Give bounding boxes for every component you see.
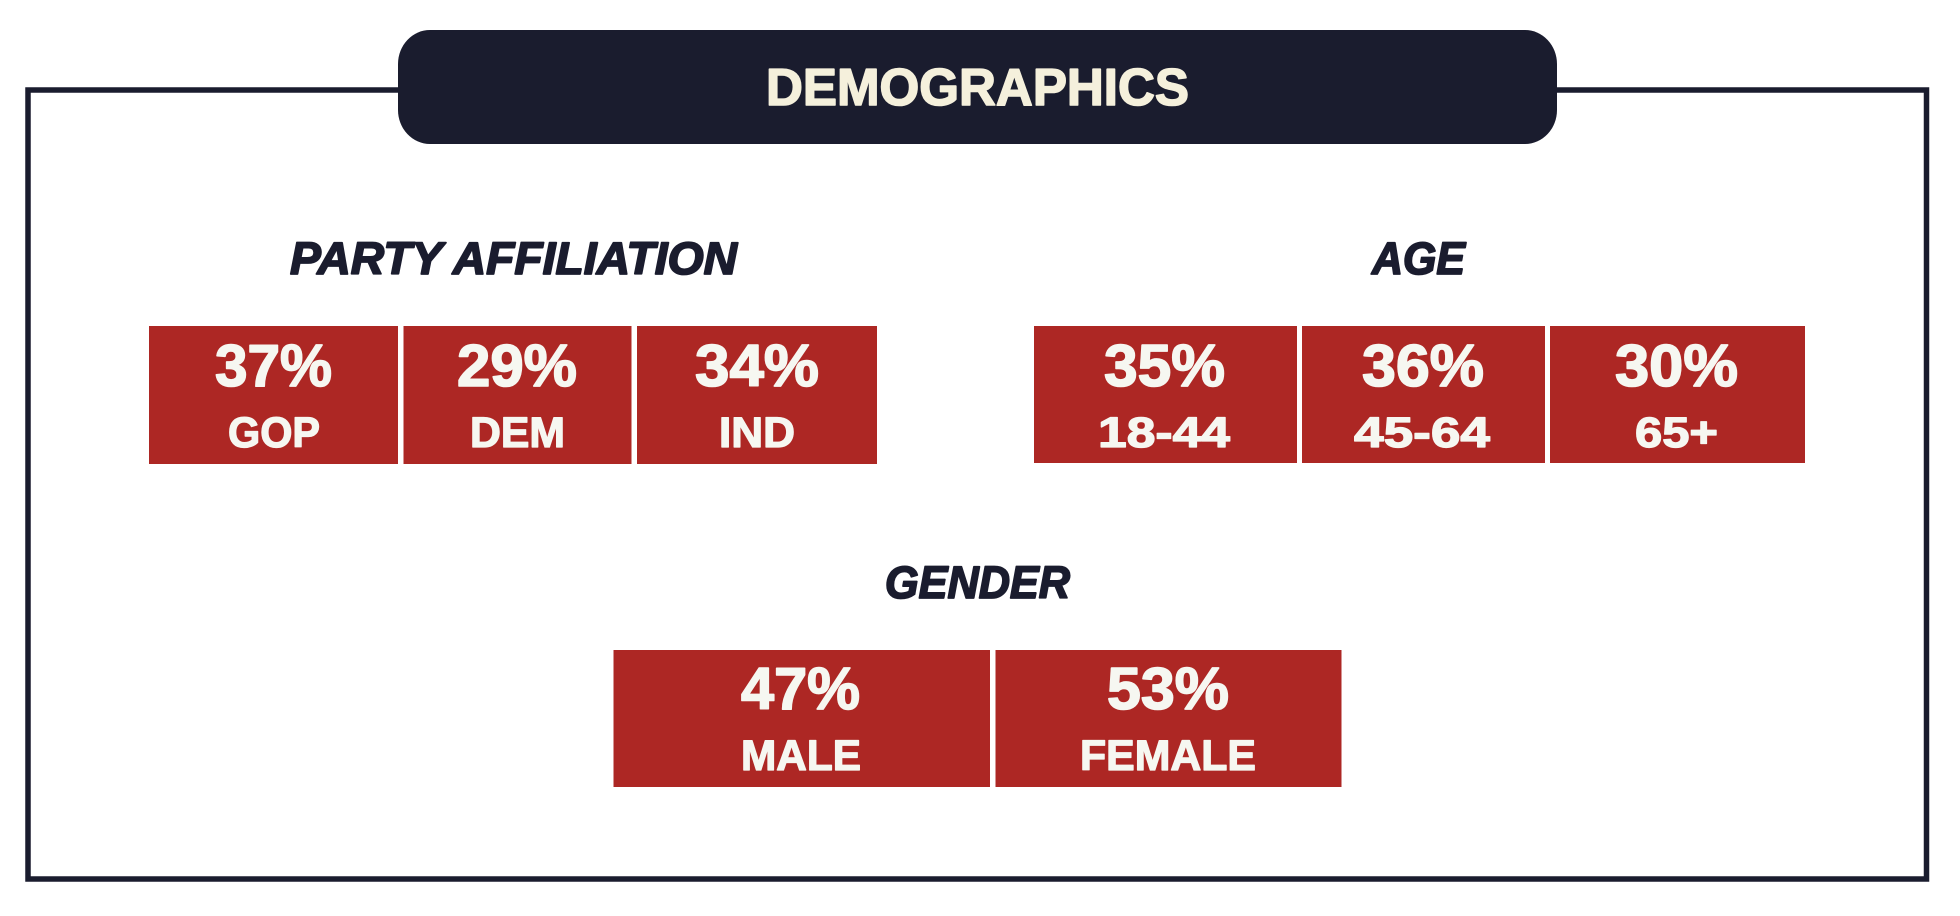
stat: 45-64 36%: 45-64	[1354, 409, 1490, 457]
stat: IND 34%: IND	[719, 409, 795, 457]
stat: 18-44 35%: 35%	[1104, 333, 1225, 399]
stat: DEM 29%: DEM	[470, 409, 565, 457]
stat: DEM 29%	[404, 326, 632, 464]
stat: male 47%: MALE	[741, 732, 861, 780]
stat: IND 34%	[637, 326, 877, 464]
group: age	[1034, 233, 1805, 463]
stat: 65+ 30%	[1550, 326, 1805, 463]
title: DEMOGRAPHICS	[766, 59, 1189, 117]
stat: female 53%: FEMALE	[1080, 732, 1256, 780]
stat: male 47%: 47%	[741, 656, 860, 722]
heading: age: AGE	[1371, 233, 1467, 284]
stat: DEM 29%: 29%	[457, 333, 577, 399]
group: party affiliation	[149, 233, 877, 464]
stat: GOP 37%: GOP	[228, 409, 320, 457]
group: gender	[614, 557, 1342, 787]
stat: 18-44 35%	[1034, 326, 1297, 463]
stat: 45-64 36%: 36%	[1362, 333, 1484, 399]
stat: GOP 37%	[149, 326, 398, 464]
title banner	[398, 30, 1557, 144]
stat: 45-64 36%	[1302, 326, 1545, 463]
stat: 18-44 35%: 18-44	[1098, 409, 1230, 457]
stat: female 53%	[996, 650, 1342, 787]
stat: IND 34%: 34%	[695, 333, 819, 399]
heading: gender: GENDER	[885, 557, 1070, 608]
heading: party affiliation: PARTY AFFILIATION	[290, 233, 739, 284]
stat: GOP 37%: 37%	[215, 333, 332, 399]
stat: male 47%	[614, 650, 990, 787]
stat: 65+ 30%: 65+	[1635, 409, 1718, 457]
stat: 65+ 30%: 30%	[1615, 333, 1738, 399]
stat: female 53%: 53%	[1107, 656, 1229, 722]
